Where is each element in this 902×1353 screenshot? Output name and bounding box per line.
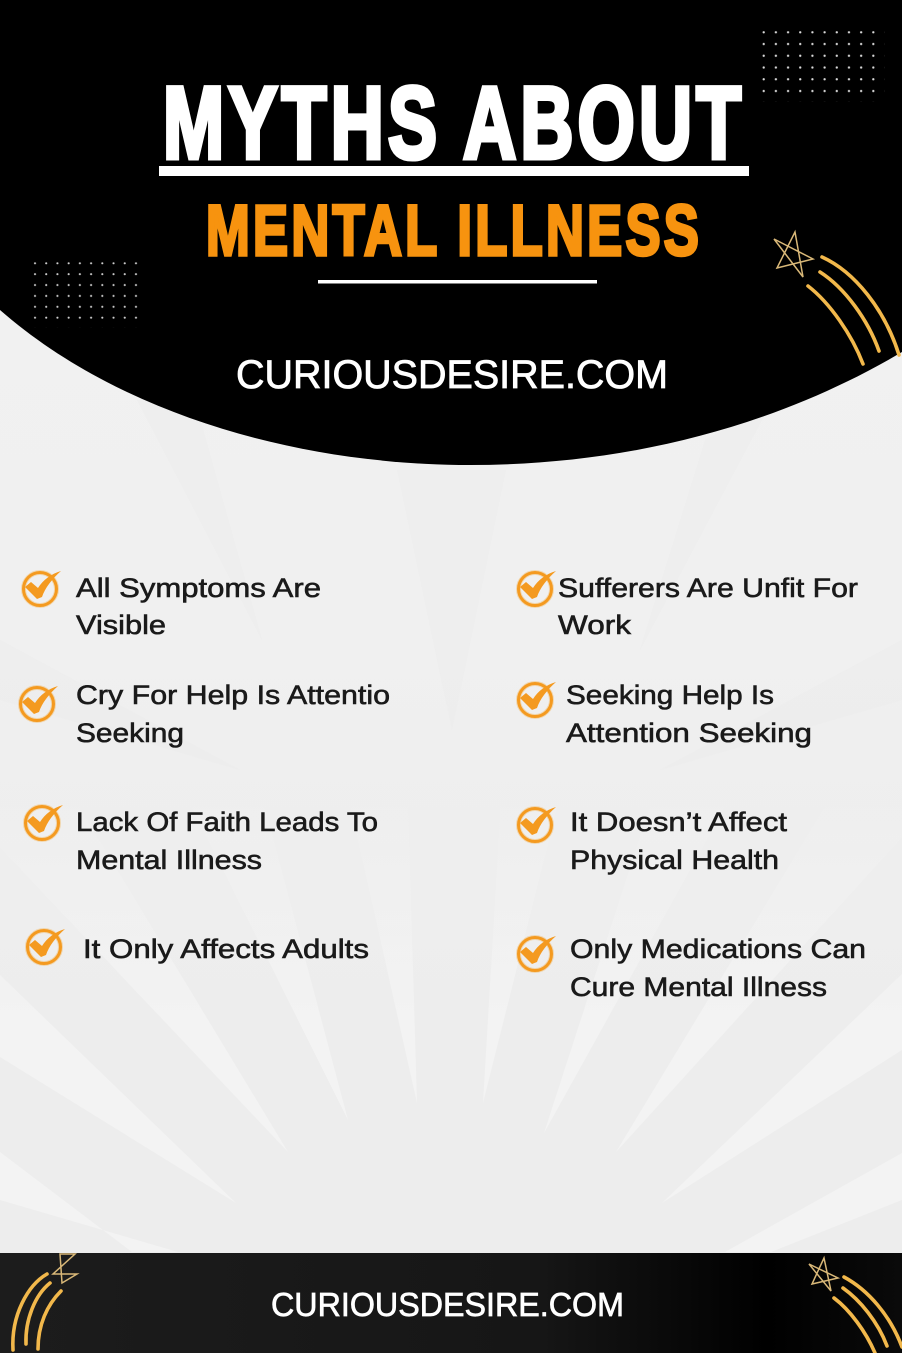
myth: lack of faith — [26, 805, 378, 875]
myth: physical health: Physical Health — [570, 845, 779, 875]
footer bar — [0, 1253, 902, 1353]
footer website text: CURIOUSDESIRE.COM — [271, 1286, 624, 1323]
myth: all symptoms are visible: All Symptoms Are — [76, 573, 321, 603]
myth: seeking help: Attention Seeking — [566, 718, 812, 748]
icon: shooting star top right — [774, 232, 899, 364]
myth: lack of faith: Lack Of Faith Leads To — [76, 807, 378, 837]
myth: only medications: Cure Mental Illness — [570, 972, 827, 1002]
myth: only affects adults — [28, 929, 369, 964]
myth: lack of faith: Mental Illness — [76, 845, 262, 875]
myth: physical health — [518, 807, 788, 875]
title: myths about: MYTHS ABOUT — [163, 66, 741, 180]
myth: all symptoms are visible: Visible — [76, 610, 166, 640]
myth: cry for help: Cry For Help Is Attentio — [76, 680, 390, 710]
myth: physical health: It Doesn’t Affect — [570, 807, 788, 837]
icon: shooting star footer right — [809, 1258, 902, 1353]
myth: seeking help: Seeking Help Is — [566, 680, 774, 710]
myth: sufferers unfit for work — [518, 571, 858, 640]
black header curve — [0, 0, 902, 465]
icon: shooting star footer left — [13, 1254, 77, 1350]
dot grid: left — [34, 262, 146, 327]
myth: only medications: Only Medications Can — [570, 934, 866, 964]
myth: seeking help — [518, 680, 812, 748]
myth: only medications — [518, 934, 866, 1002]
myth: cry for help — [20, 680, 390, 748]
myth: sufferers unfit for work: Sufferers Are Unfit For — [558, 573, 858, 603]
myth: only affects adults: It Only Affects Adults — [83, 934, 369, 964]
myth: sufferers unfit for work: Work — [558, 610, 632, 640]
website heading: CURIOUSDESIRE.COM — [236, 353, 668, 397]
myth: cry for help: Seeking — [76, 718, 184, 748]
dot grid: top right — [762, 31, 884, 102]
subtitle underline — [318, 280, 597, 284]
subtitle: mental illness: MENTAL ILLNESS — [206, 191, 699, 271]
myth: all symptoms are visible — [24, 571, 321, 640]
title underline — [159, 166, 749, 176]
